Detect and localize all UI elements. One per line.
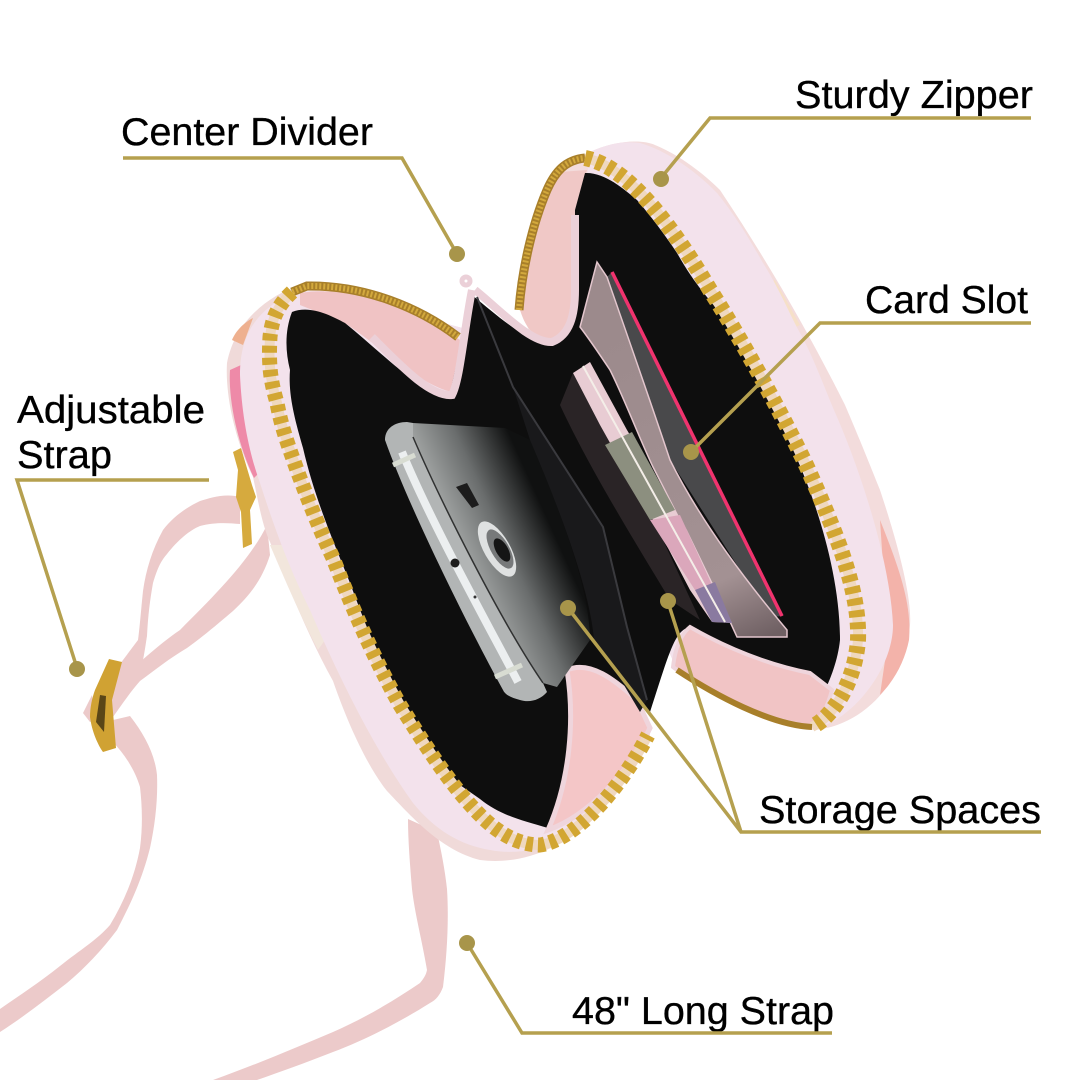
card slot: suede pocket	[580, 262, 787, 637]
bag: right pink lining	[520, 170, 587, 342]
label: Card Slot	[683, 279, 1031, 460]
icon: zipper on right half	[519, 158, 858, 727]
bag: left half shell	[227, 285, 650, 861]
card slot: grey card with pink edge	[607, 272, 783, 617]
bag: left pink lining	[300, 291, 460, 392]
label: Center Divider	[121, 111, 465, 262]
label: 48" Long Strap	[459, 935, 834, 1033]
center pocket flap	[477, 297, 647, 712]
bag: bottom right pink pocket	[673, 627, 832, 726]
bag: black interior	[286, 173, 840, 828]
icon: strap buckle	[83, 659, 122, 752]
label: 48" Long Strap: 48" Long Strap	[572, 990, 834, 1033]
label: Sturdy Zipper	[653, 74, 1033, 187]
label: Storage Spaces: Storage Spaces	[759, 789, 1041, 832]
icon: strap clip	[233, 448, 256, 548]
phone	[385, 422, 590, 701]
label: Card Slot: Card Slot	[865, 279, 1028, 322]
icon: zipper on left half	[269, 286, 648, 845]
strap: adjustable loop and long strap	[0, 496, 448, 1080]
label: Center Divider: Center Divider	[121, 111, 373, 154]
bag: right half shell	[520, 141, 910, 730]
label: Adjustable Strap: Strap	[17, 434, 112, 477]
label: Adjustable Strap	[17, 389, 209, 677]
bag: center divider rim	[372, 215, 575, 395]
bag: bottom left pink pocket	[548, 667, 650, 830]
label: Sturdy Zipper: Sturdy Zipper	[795, 74, 1033, 117]
label: Storage Spaces	[560, 593, 1041, 832]
cards in pocket	[560, 362, 732, 623]
label: Adjustable Strap: Adjustable	[17, 389, 205, 432]
